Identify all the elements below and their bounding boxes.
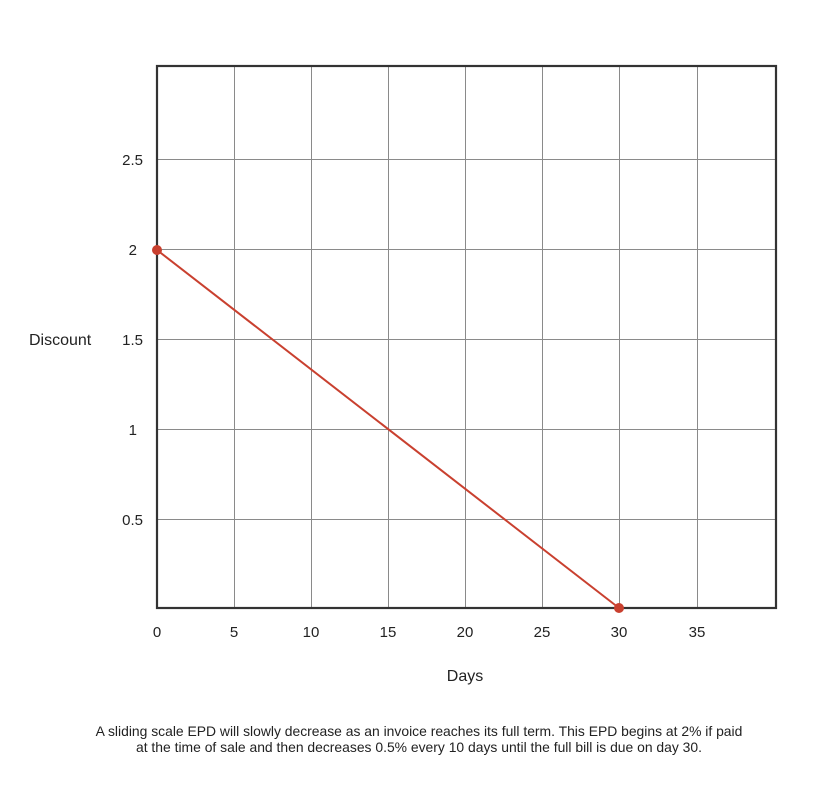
y axis labels bbox=[122, 152, 143, 529]
y axis labels: 0.5 bbox=[122, 512, 143, 529]
caption: A sliding scale EPD will slowly decrease as an invoice reaches its full term. This EPD begins at 2% if paid bbox=[96, 723, 742, 739]
y axis labels: 2 bbox=[129, 242, 137, 259]
y axis labels: 1 bbox=[129, 422, 137, 439]
plot frame bbox=[157, 66, 776, 608]
y axis labels: 2.5 bbox=[122, 152, 143, 169]
x axis labels: 0 bbox=[153, 624, 161, 641]
x axis labels: 10 bbox=[303, 624, 319, 641]
caption bbox=[96, 723, 742, 755]
caption: at the time of sale and then decreases 0.5% every 10 days until the full bill is due on day 30. bbox=[136, 739, 702, 755]
data line bbox=[152, 245, 624, 613]
x axis labels: 5 bbox=[230, 624, 238, 641]
y axis labels: 1.5 bbox=[122, 332, 143, 349]
y axis title: Discount bbox=[29, 332, 92, 349]
x axis labels: 30 bbox=[611, 624, 627, 641]
x axis title: Days bbox=[447, 668, 483, 685]
x axis labels: 25 bbox=[534, 624, 550, 641]
x axis labels: 35 bbox=[689, 624, 705, 641]
x axis labels bbox=[153, 624, 705, 641]
grid lines bbox=[157, 66, 776, 608]
x axis labels: 15 bbox=[380, 624, 396, 641]
x axis labels: 20 bbox=[457, 624, 473, 641]
